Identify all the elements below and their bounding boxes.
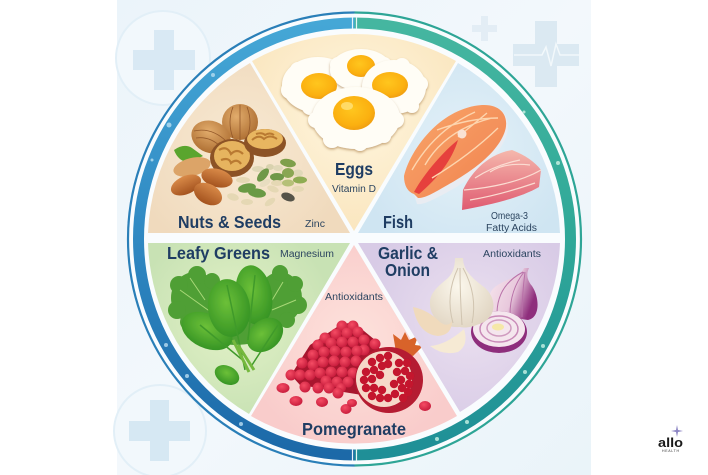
- icon: medical cross in circle, top left: [116, 11, 210, 105]
- heading: Garlic & Onion: [378, 243, 438, 280]
- icon: garlic: [413, 258, 494, 353]
- heading: Pomegranate: Pomegranate: [302, 419, 406, 439]
- panel: fish: [358, 63, 560, 234]
- panel: pomegranate: [251, 245, 457, 444]
- icon: cross with heartbeat, top right: [513, 21, 579, 87]
- label: Antioxidants: Antioxidants: [483, 249, 541, 260]
- label: Antioxidants: Antioxidants: [325, 292, 383, 303]
- icon: cut pomegranate fruit: [355, 332, 423, 413]
- icon: nuts: [168, 104, 286, 210]
- label: Zinc: Zinc: [305, 219, 325, 230]
- icon: leafy greens bunch: [168, 262, 307, 389]
- panel: eggs: [252, 34, 456, 231]
- label: Omega-3 Fatty Acids: [486, 211, 537, 234]
- panel: garlic and onion: [358, 243, 560, 412]
- heading: Nuts & Seeds: Nuts & Seeds: [178, 212, 281, 232]
- panel: nuts and seeds: [148, 63, 350, 233]
- icon: pomegranate arils pile: [276, 320, 431, 414]
- label: Omega-3 Fatty Acids: Fatty Acids: [486, 223, 537, 234]
- label: Magnesium: Magnesium: [280, 249, 334, 260]
- logo: allo health: HEALTH: [662, 449, 679, 453]
- logo: allo health: [658, 425, 683, 453]
- heading: Fish: Fish: [383, 212, 413, 232]
- outer ring: [128, 12, 581, 466]
- background panel: [117, 0, 591, 475]
- logo: allo health: allo: [658, 435, 683, 450]
- icon: medical cross in circle, bottom left: [114, 385, 206, 475]
- panel: leafy greens: [148, 243, 350, 414]
- icon: salmon steak: [404, 105, 508, 204]
- icon: seeds: [226, 158, 307, 208]
- icon: tuna fillet: [462, 150, 541, 210]
- label: Vitamin D: Vitamin D: [332, 184, 376, 195]
- icon: onion: [471, 268, 538, 353]
- icon: fried eggs: [281, 49, 428, 151]
- heading: Eggs: Eggs: [335, 159, 373, 179]
- heading: Leafy Greens: Leafy Greens: [167, 243, 270, 263]
- heading: Garlic & Onion: Onion: [385, 260, 430, 280]
- icon: small cross, top right: [472, 16, 497, 41]
- label: Omega-3 Fatty Acids: Omega-3: [491, 211, 528, 222]
- heading: Garlic & Onion: Garlic &: [378, 243, 438, 263]
